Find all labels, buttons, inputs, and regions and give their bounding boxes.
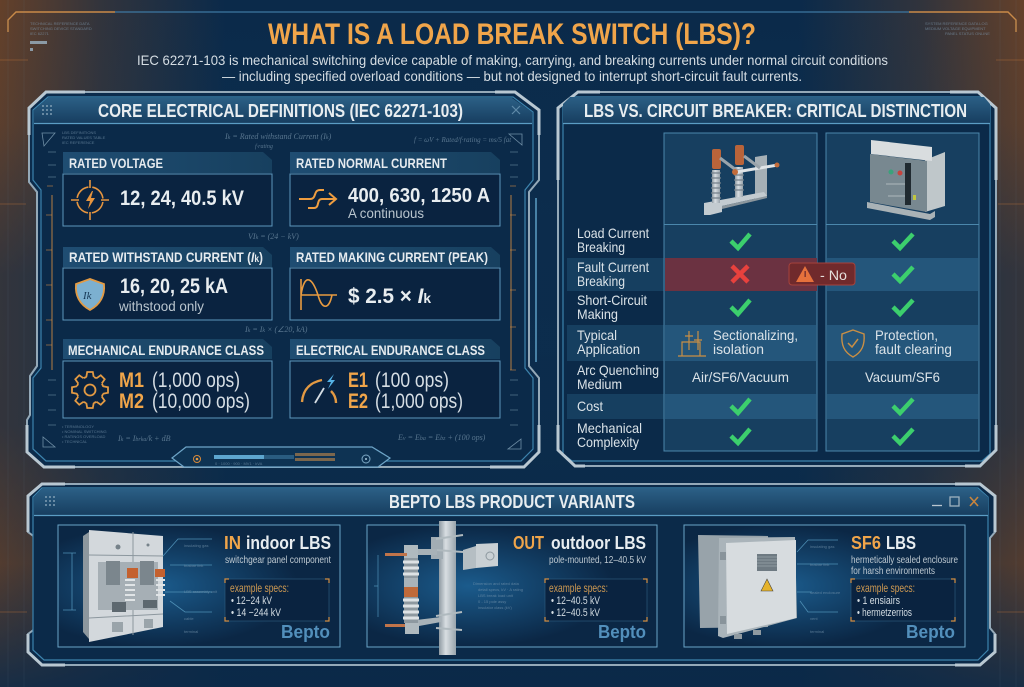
row labels: Fault Current [577, 259, 649, 275]
formula notes: Ev = Eba = Ebz + (100 ops) [397, 433, 486, 442]
image: circuit breaker [867, 140, 945, 220]
row labels: Breaking [577, 273, 625, 289]
formula notes: VIk = (24 − kV) [248, 232, 299, 241]
card: mechanical endurance class [63, 339, 272, 418]
image: load break switch [704, 145, 780, 215]
callouts [63, 539, 212, 612]
card: SF6 LBS [684, 525, 965, 647]
icon: window controls [932, 497, 978, 506]
card: rated making current [290, 247, 500, 320]
subtitle: — including specified overload conditions — but not designed to interrupt short-circuit fault currents. [222, 68, 802, 84]
text: outdoor heading: OUT [513, 533, 544, 553]
callouts: vent [810, 616, 818, 621]
badge: warning no [789, 263, 855, 285]
card: electrical endurance class: (100 ops) [375, 369, 449, 392]
row labels: Application [577, 341, 640, 357]
cell: protection: fault clearing [875, 341, 952, 357]
image: sealed enclosure [698, 535, 797, 639]
card: mechanical endurance class: MECHANICAL ENDURANCE CLASS [68, 342, 264, 358]
cell: sectionalizing: Sectionalizing, [713, 327, 798, 343]
card: electrical endurance class: E2 [348, 390, 368, 413]
icon: gear [72, 372, 108, 408]
icon: grip dots [45, 496, 55, 506]
spec box [851, 579, 955, 621]
formula notes: RATED VALUES TABLE [62, 135, 106, 140]
formula notes: Ik = Ik × (∠20, kA) [244, 325, 308, 334]
card: rated withstand current: RATED WITHSTAND CURRENT (Ik) [69, 249, 263, 265]
card: electrical endurance class: ELECTRICAL ENDURANCE CLASS [296, 342, 485, 358]
text: outdoor heading [513, 533, 646, 553]
card: indoor LBS: insulating gas [184, 543, 208, 548]
panel: product variants [28, 484, 995, 665]
card: electrical endurance class: E1 [348, 369, 368, 392]
callouts: Dimension and rated data [473, 581, 520, 586]
card: outdoor LBS: pole-mounted, 12–40.5 kV [549, 554, 646, 566]
card: rated voltage: 12, 24, 40.5 kV [120, 187, 244, 210]
corner notes: SWITCHING DEVICE STANDARD [30, 26, 92, 31]
panel: core electrical definitions [27, 92, 539, 467]
formula notes: f = ωV + Rated/f·rating = ms/5 fat [414, 136, 512, 144]
formula notes: • TECHNICAL [62, 439, 88, 444]
card: electrical endurance class: (1,000 ops) [375, 390, 463, 413]
card: rated normal current: RATED NORMAL CURRENT [296, 155, 447, 171]
formula notes: IEC REFERENCE [62, 140, 95, 145]
callouts: busbar link [810, 562, 829, 567]
spec box [545, 579, 647, 621]
card: indoor LBS: switchgear panel component [225, 554, 331, 566]
panel header [34, 98, 532, 123]
callouts: detail specs, kV · A rating [478, 587, 523, 592]
badge: warning no: - No [820, 267, 847, 283]
spec box: • 1 ensiairs [857, 595, 900, 607]
corner notes: PANEL STATUS ONLINE [945, 31, 990, 36]
callouts: insulating gas [810, 544, 834, 549]
card: rated normal current: A continuous [348, 205, 424, 221]
panel: LBS vs circuit breaker [558, 92, 996, 466]
spec box: example specs: [549, 581, 608, 595]
left scale [46, 152, 56, 425]
card: rated withstand current: 16, 20, 25 kA [120, 275, 228, 298]
callouts [374, 555, 523, 617]
spec box: example specs: [856, 581, 915, 595]
formula notes: Ik = Rated withstand Current (Ik) [224, 132, 332, 141]
icon: close [512, 106, 520, 114]
panel heading: CORE ELECTRICAL DEFINITIONS (IEC 62271-103) [98, 101, 463, 121]
card: mechanical endurance class: (1,000 ops) [152, 369, 240, 392]
formula notes: LBS DEFINITIONS [62, 130, 96, 135]
row labels: Typical [577, 327, 617, 343]
card: indoor LBS: LBS assembly unit [184, 589, 218, 594]
corner notes: MEDIUM VOLTAGE EQUIPMENT [925, 26, 986, 31]
icon: sine wave [301, 279, 337, 310]
formula notes: • RATINGS OVERLOAD [62, 434, 105, 439]
row bands [567, 133, 979, 451]
corner notes: SYSTEM REFERENCE DATA LOG [925, 21, 988, 26]
spec box: • 12−24 kV [231, 595, 272, 607]
icon: target bolt [71, 180, 109, 220]
row labels: Cost [577, 398, 603, 414]
card: rated making current: RATED MAKING CURRENT (PEAK) [296, 249, 488, 265]
card: rated normal current: 400, 630, 1250 A [348, 185, 490, 207]
text: SF6 heading: LBS [886, 533, 916, 553]
cell: air sf6 vacuum: Air/SF6/Vacuum [692, 369, 789, 385]
status bar [172, 447, 390, 467]
spec box: • 12−40.5 kV [551, 607, 601, 619]
card: indoor LBS: busbar link [184, 563, 203, 568]
icon: grip dots [42, 105, 52, 115]
card: mechanical endurance class: (10,000 ops) [152, 390, 250, 413]
logo: Bepto [906, 622, 955, 642]
card: rated normal current [290, 152, 500, 226]
row labels: Breaking [577, 239, 625, 255]
card: indoor LBS [58, 525, 340, 647]
spec box: • hermetzerrios [857, 607, 912, 619]
comparison table [567, 133, 979, 451]
spec box: example specs: [230, 581, 289, 595]
icon: gauge with spark [302, 374, 336, 403]
corner notes: IEC 62271 [30, 31, 50, 36]
card: rated withstand current: withstood only [118, 298, 204, 314]
card: mechanical endurance class: M2 [119, 390, 144, 413]
text: SF6 heading [851, 533, 916, 553]
card: outdoor LBS [367, 521, 657, 655]
cell: protection: Protection, [875, 327, 938, 343]
row labels: Complexity [577, 434, 639, 450]
image: pole mounted switch [385, 521, 498, 655]
card: rated voltage: RATED VOLTAGE [69, 155, 163, 171]
callouts: insulator class (kV) [478, 605, 512, 610]
right scale [510, 152, 518, 425]
icons: check marks [731, 234, 913, 443]
card: electrical endurance class [290, 339, 500, 418]
callouts: LBS break load unit [478, 593, 514, 598]
card: rated making current: $ 2.5 × Ik [348, 285, 431, 308]
status bar: 0 · 1000 · 900 · MV1 · kVA [215, 461, 263, 466]
spec box [225, 579, 329, 621]
panel heading: BEPTO LBS PRODUCT VARIANTS [389, 492, 635, 512]
callouts: 0 - 15 pole assy [478, 599, 506, 604]
spec box: • 14 −244 kV [231, 607, 282, 619]
row labels: Medium [577, 376, 622, 392]
row labels: Load Current [577, 225, 649, 241]
row labels: Making [577, 306, 618, 322]
formula notes: • TERMINOLOGY [62, 424, 94, 429]
panel header [34, 489, 988, 515]
cell: sectionalizing: isolation [713, 341, 764, 357]
corner notes: TECHNICAL REFERENCE DATA [30, 21, 90, 26]
callouts: terminal [810, 629, 824, 634]
cell: vacuum sf6: Vacuum/SF6 [865, 369, 940, 385]
card: SF6 LBS: hermetically sealed enclosure [851, 554, 958, 566]
callouts [797, 540, 841, 634]
title: WHAT IS A LOAD BREAK SWITCH (LBS)? [268, 18, 756, 51]
formula notes: • NOMINAL SWITCHING [62, 429, 107, 434]
cell: protection [842, 327, 952, 357]
formula notes: f·rating [255, 143, 273, 150]
icon: shield [76, 279, 104, 310]
row labels [577, 225, 659, 450]
subtitle [137, 52, 888, 84]
logo: Bepto [281, 622, 330, 642]
row labels: Short-Circuit [577, 292, 647, 308]
cell: sectionalizing [678, 327, 798, 357]
card: SF6 LBS: for harsh environments [851, 565, 935, 577]
spec box: • 12−40.5 kV [551, 595, 601, 607]
card: mechanical endurance class: M1 [119, 369, 144, 392]
text: SF6 heading: SF6 [851, 533, 881, 553]
text: outdoor heading: outdoor LBS [551, 533, 646, 553]
row labels: Arc Quenching [577, 362, 659, 378]
formula notes: Ik = Ibrka/k + dB [117, 434, 171, 443]
card: rated withstand current [63, 247, 272, 320]
card: rated voltage [63, 152, 272, 226]
icon: red cross [732, 266, 748, 282]
formula notes [42, 130, 522, 449]
panel header [563, 97, 990, 123]
text: indoor heading: indoor LBS [246, 533, 331, 553]
row labels: Mechanical [577, 420, 642, 436]
callouts: sealed enclosure [810, 590, 841, 595]
subtitle: IEC 62271-103 is mechanical switching device capable of making, carrying, and breaking currents under normal circuit conditions [137, 52, 888, 68]
image: switchgear panel [83, 530, 165, 642]
text: indoor heading: IN [224, 533, 241, 553]
card: indoor LBS: cable [184, 616, 194, 621]
logo: Bepto [598, 622, 646, 642]
card: indoor LBS: terminal [184, 629, 198, 634]
icon: current arrow [299, 190, 336, 208]
icon: shield: Ik [82, 290, 93, 302]
corner notes [30, 21, 990, 51]
